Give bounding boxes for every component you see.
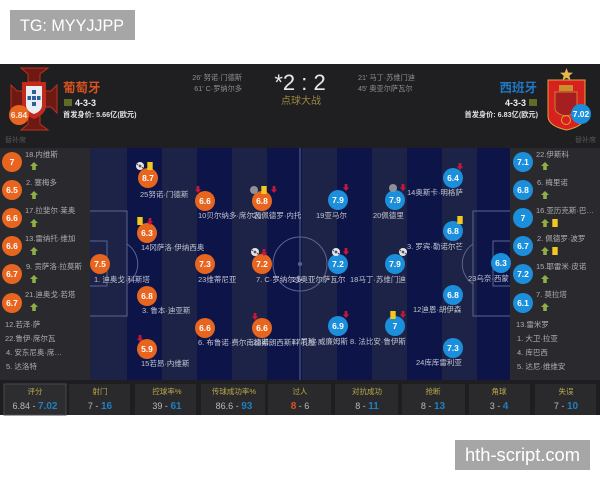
unused substitutes: 12.若泽·萨 <box>5 319 41 329</box>
icon: Spain crest <box>548 80 585 130</box>
player: 12 Huijsen <box>413 285 463 314</box>
stat: shots: 射门 <box>92 386 108 396</box>
sub rating rows: 17.拉斐尔·莱奥 <box>25 205 76 215</box>
stat: turnovers: 失误 <box>558 386 574 396</box>
stat: rating: 6.84 - 7.02 <box>13 401 58 412</box>
player: 20 Pedro Neto <box>250 186 302 220</box>
tag: top left: TG: MYYJJPP <box>20 16 124 35</box>
stat: duels won: 8 - 11 <box>355 401 379 412</box>
header: Portugal team <box>9 68 137 130</box>
stat: pass accuracy <box>201 384 265 415</box>
player: 23 Unai Simon: 23乌奈·西蒙 <box>468 273 509 283</box>
formation: Portugal: 4-3-3 <box>75 98 96 108</box>
goals: Spain <box>358 73 415 93</box>
sub rating rows: 6. 梅里诺 <box>537 177 568 187</box>
sub rating rows: 7.1 <box>517 157 529 167</box>
stat: corners: 3 - 4 <box>490 401 509 412</box>
player: 14 Inacio: 14冈萨洛·伊纳西奥 <box>141 242 205 252</box>
subtitle: penalty shootout: 点球大战 <box>281 94 321 107</box>
unused substitutes: 5. 达洛特 <box>6 361 37 371</box>
player: 28 Francisco Conceicao: 28弗朗西斯科·孔塞 <box>253 337 317 347</box>
player: 25 Nuno Mendes <box>136 162 189 199</box>
main match graphic <box>0 64 600 415</box>
stat: rating <box>4 384 66 415</box>
sub rating rows: 7.2 <box>517 269 529 279</box>
stat: pass accuracy: 86.6 - 93 <box>216 401 253 412</box>
player: 24 Cucurella: 24库库雷利亚 <box>416 357 462 367</box>
player: 20 Pedri: 7.9 <box>389 195 401 205</box>
player: 7 Ronaldo: 7.2 <box>256 259 268 269</box>
Portugal players <box>90 162 317 368</box>
player: 23 Unai Simon: 6.3 <box>495 258 507 268</box>
sub rating rows: 16.亚历克斯·巴… <box>536 205 594 215</box>
stat: possession: 控球率% <box>152 386 182 396</box>
player: 25 Nuno Mendes: 8.7 <box>142 173 154 183</box>
player: 6 Bruno Fernandes: 6.6 <box>199 323 211 333</box>
player: 20 Pedro Neto: 20佩德罗·内托 <box>253 210 302 220</box>
player: 17 Nico Williams: 6.9 <box>332 321 344 331</box>
team name: Portugal: 葡萄牙 <box>63 80 101 95</box>
sub rating rows: 6.6 <box>6 241 18 251</box>
stat: duels won <box>335 384 398 415</box>
player: 7 Ronaldo <box>251 248 303 284</box>
unused substitutes: 4. 安东尼奥·席… <box>6 347 62 357</box>
player: 19 Yamal: 19亚马尔 <box>316 210 347 220</box>
formation: Spain: 4-3-3 <box>505 98 526 108</box>
Spain players <box>292 163 511 367</box>
stat: dribbles <box>268 384 331 415</box>
player: 25 Nuno Mendes: 25努诺·门德斯 <box>140 189 189 199</box>
stats bar <box>0 380 600 415</box>
stat: dribbles: 8 - 6 <box>291 401 309 412</box>
player: 12 Huijsen: 6.8 <box>447 290 459 300</box>
stat: tackles: 8 - 13 <box>421 401 446 412</box>
sub rating rows: 22.伊斯科 <box>536 149 569 159</box>
market value: Spain: 首发身价: 6.83亿(欧元) <box>465 110 539 119</box>
sub rating rows: 13.雷纳托·维加 <box>25 233 75 243</box>
player: 20 Pedro Neto: 6.8 <box>256 196 268 206</box>
player: 23 Vitinha: 23维蒂尼亚 <box>198 274 237 284</box>
unused substitutes: 1. 大卫·拉亚 <box>517 333 558 343</box>
player: 17 Nico Williams <box>292 311 349 346</box>
unused substitutes <box>516 319 566 371</box>
player: 3 Le Normand: 3. 罗宾·勒诺尔芒 <box>407 241 463 251</box>
player: 8 Fabian Ruiz: 7 <box>393 321 398 331</box>
stat: shots: 7 - 16 <box>88 401 113 412</box>
player: 10 Bernardo Silva: 6.6 <box>199 196 211 206</box>
player: 18 Zubimendi: 7.9 <box>389 259 401 269</box>
market value: Portugal: 首发身价: 5.66亿(欧元) <box>63 110 137 119</box>
player: 21 Oyarzabal <box>292 248 349 284</box>
player: 7 Ronaldo: 7. C·罗纳尔多 <box>256 274 303 284</box>
stat: possession <box>135 384 196 415</box>
player: 6 Bruno Fernandes: 6. 布鲁诺·费尔南德斯 <box>198 337 269 347</box>
sub rating rows: 6.7 <box>6 269 18 279</box>
stat: corners: 角球 <box>492 386 507 396</box>
stat: turnovers: 7 - 10 <box>554 401 579 412</box>
player: 20 Pedri <box>373 184 406 220</box>
tag: bottom right <box>455 440 590 470</box>
player: 6 Bruno Fernandes <box>195 318 269 347</box>
sub rating rows: 2. 佩德罗·波罗 <box>537 233 585 243</box>
sub rating rows: 6.7 <box>6 298 18 308</box>
player: 8 Fabian Ruiz: 8. 法比安·鲁伊斯 <box>350 336 406 346</box>
player: 14 Inacio <box>137 217 205 252</box>
heading: substitutes: 替补席 <box>575 135 596 144</box>
sub rating rows: 6.1 <box>517 298 529 308</box>
player: 8 Fabian Ruiz <box>350 311 406 346</box>
player: 1 Diogo Costa <box>90 254 150 284</box>
sub rating rows: 6.6 <box>6 213 18 223</box>
sub rating rows: 2. 塞梅多 <box>26 177 57 187</box>
player: 19 Yamal <box>316 184 349 220</box>
stat: rating: 评分 <box>28 387 43 396</box>
stat: pass accuracy: 传球成功率% <box>212 386 256 396</box>
sub rating rows <box>513 149 594 313</box>
panel: Spain substitutes <box>510 135 600 384</box>
player: 21 Oyarzabal: 7.2 <box>332 259 344 269</box>
rating badge: Spain: 7.02 <box>573 109 590 119</box>
player: 3 Ruben Dias: 3. 鲁本·迪亚斯 <box>142 305 191 315</box>
icon: star <box>560 68 573 80</box>
unused substitutes: 22.鲁伊·席尔瓦 <box>5 333 56 343</box>
player: 24 Cucurella: 7.3 <box>447 343 459 353</box>
sub rating rows: 15.耶雷米·皮诺 <box>536 261 587 271</box>
sub rating rows: 7 <box>521 213 526 223</box>
stat: dribbles: 过人 <box>292 386 308 396</box>
panel: Portugal substitutes <box>0 135 90 384</box>
goals: Portugal: 61' C·罗纳尔多 <box>194 84 242 93</box>
player: 14 Oscar Mingueza <box>407 163 463 197</box>
score: *2 : 2 <box>274 70 326 95</box>
sub rating rows <box>2 149 82 313</box>
player: 10 Bernardo Silva: 10贝尔纳多·席尔瓦 <box>198 210 262 220</box>
player: 24 Cucurella <box>416 338 463 367</box>
player: 23 Vitinha <box>195 254 237 284</box>
unused substitutes: 5. 达尼·维维安 <box>517 361 566 371</box>
player: 18 Zubimendi <box>350 248 407 284</box>
football pitch <box>90 148 510 380</box>
unused substitutes: 4. 库巴西 <box>517 347 548 357</box>
sub rating rows: 7 <box>10 157 15 167</box>
player: 3 Le Normand <box>407 216 463 251</box>
player: 17 Nico Williams: 17尼科·威廉姆斯 <box>292 336 348 346</box>
stat: possession: 39 - 61 <box>152 401 182 412</box>
player: 14 Oscar Mingueza: 6.4 <box>447 173 459 183</box>
sub rating rows: 9. 贡萨洛·拉莫斯 <box>26 261 82 271</box>
player: 15 Joao Neves: 15若昂·内维斯 <box>141 358 190 368</box>
player: 23 Vitinha: 7.3 <box>199 259 211 269</box>
stat: shots <box>69 384 130 415</box>
sub rating rows: 6.7 <box>517 241 529 251</box>
player: 10 Bernardo Silva <box>195 186 262 220</box>
player: 3 Ruben Dias: 6.8 <box>141 291 153 301</box>
stat: tackles <box>402 384 465 415</box>
sub rating rows: 18.内维斯 <box>25 149 58 159</box>
player: 1 Diogo Costa: 1. 迪奥戈·科斯塔 <box>94 274 150 284</box>
goals: Spain: 45' 奥亚尔萨瓦尔 <box>358 84 412 93</box>
player: 3 Le Normand: 6.8 <box>447 226 459 236</box>
player: 18 Zubimendi: 18马丁·苏维门迪 <box>350 274 406 284</box>
player: 14 Oscar Mingueza: 14奥斯卡·明格萨 <box>407 187 463 197</box>
player: 28 Francisco Conceicao <box>252 313 317 347</box>
stat: duels won: 对抗成功 <box>352 386 382 396</box>
rating badge: Portugal: 6.84 <box>11 110 28 120</box>
goals: Spain: 21' 马丁·苏维门迪 <box>358 73 415 82</box>
header: Spain team <box>465 68 591 130</box>
unused substitutes: 13.雷米罗 <box>516 319 549 329</box>
scoreboard panel <box>0 64 600 415</box>
sub rating rows: 21.迪奥戈·若塔 <box>25 289 76 299</box>
player: 12 Huijsen: 12迪恩·胡伊森 <box>413 304 462 314</box>
stat: tackles: 抢断 <box>426 386 441 396</box>
stat: corners <box>469 384 530 415</box>
tag: bottom right: hth-script.com <box>465 445 580 465</box>
player: 19 Yamal: 7.9 <box>332 195 344 205</box>
player: 1 Diogo Costa: 7.5 <box>94 259 106 269</box>
icon: Portugal crest <box>11 68 57 130</box>
sub rating rows: 6.5 <box>6 185 18 195</box>
stat: turnovers <box>535 384 596 415</box>
player: 3 Ruben Dias <box>137 286 191 315</box>
goals: Portugal <box>192 73 242 93</box>
tag: top left <box>10 10 135 40</box>
team name: Spain: 西班牙 <box>499 80 537 95</box>
player: 21 Oyarzabal: 21奥亚尔萨瓦尔 <box>292 274 346 284</box>
player: 28 Francisco Conceicao: 6.6 <box>256 323 268 333</box>
player: 23 Unai Simon <box>468 253 511 283</box>
player: 15 Joao Neves <box>137 335 190 368</box>
sub rating rows: 6.8 <box>517 185 529 195</box>
unused substitutes <box>5 319 62 371</box>
player: 15 Joao Neves: 5.9 <box>141 344 153 354</box>
heading: substitutes: 替补席 <box>5 135 26 144</box>
sub rating rows: 7. 莫拉塔 <box>536 289 567 299</box>
goals: Portugal: 26' 努诺·门德斯 <box>192 73 242 82</box>
player: 14 Inacio: 6.3 <box>141 228 153 238</box>
player: 20 Pedri: 20佩德里 <box>373 210 404 220</box>
